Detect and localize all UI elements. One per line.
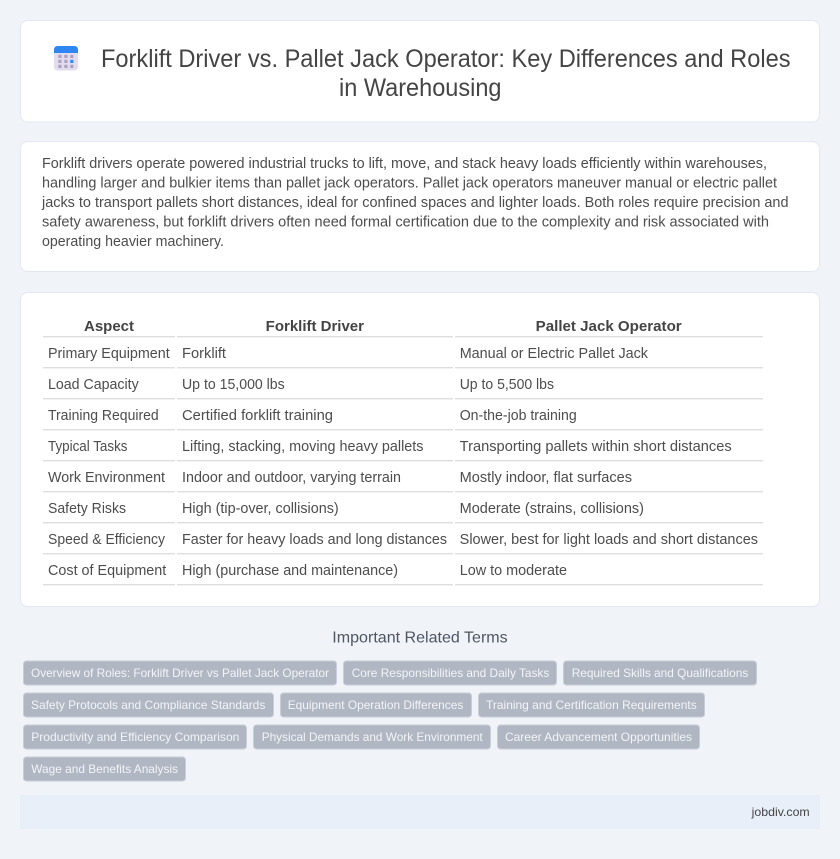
tag: physical demands: Physical Demands and Work Environment [262, 730, 483, 744]
text block: summary paragraph: jacks to transport pallets short distances, ideal for confined spaces and lighter loads. Both roles require precision and [41, 195, 789, 211]
text block: summary paragraph: Forklift drivers operate powered industrial trucks to lift, move, and stack heavy loads efficiently within warehouses, [42, 156, 767, 172]
table row: training required: Training Required [48, 408, 159, 424]
title: Forklift Driver vs. Pallet Jack Operator: Key Differences and Roles [101, 45, 790, 73]
table row: primary equipment [43, 346, 763, 368]
table row: cost of equipment [43, 563, 763, 585]
table row: training required [43, 408, 763, 430]
text block: summary paragraph: operating heavier machinery. [42, 234, 224, 250]
tag: required skills [564, 661, 756, 685]
table header row: Forklift Driver [266, 319, 364, 335]
table row: typical tasks: Typical Tasks [48, 439, 128, 455]
tag: wage and benefits: Wage and Benefits Analysis [31, 762, 178, 776]
table row: safety risks: Safety Risks [48, 501, 126, 517]
tag: equipment operation: Equipment Operation Differences [288, 698, 463, 712]
icon: calendar [54, 46, 78, 70]
table header row: Pallet Jack Operator [536, 319, 682, 335]
table row: work environment [43, 470, 763, 492]
table row: safety risks: High (tip-over, collisions) [182, 501, 339, 517]
text block: summary paragraph: safety awareness, but forklift drivers often need formal certification due to the complexity and risk associated with [42, 214, 769, 230]
tag: career advancement [498, 725, 700, 749]
title [101, 45, 790, 102]
table row: primary equipment: Forklift [182, 346, 226, 362]
table row: load capacity: Up to 15,000 lbs [182, 377, 285, 393]
panel: comparison table [20, 292, 820, 606]
table row: load capacity: Up to 5,500 lbs [460, 377, 554, 393]
tag: overview of roles [24, 661, 336, 685]
table row: speed and efficiency: Slower, best for light loads and short distances [460, 532, 758, 548]
table row: primary equipment: Manual or Electric Pallet Jack [460, 346, 649, 362]
tag: core responsibilities: Core Responsibilities and Daily Tasks [352, 666, 549, 680]
tag: career advancement: Career Advancement Opportunities [505, 730, 692, 744]
table row: load capacity: Load Capacity [48, 377, 139, 393]
tag: productivity [24, 725, 246, 749]
table row: primary equipment: Primary Equipment [48, 346, 170, 362]
table row: typical tasks: Transporting pallets within short distances [460, 439, 732, 455]
footer [20, 795, 820, 829]
table row: cost of equipment: High (purchase and maintenance) [182, 563, 398, 579]
table row: typical tasks: Lifting, stacking, moving heavy pallets [182, 439, 424, 455]
table row: work environment: Mostly indoor, flat surfaces [460, 470, 632, 486]
tag: overview of roles: Overview of Roles: Forklift Driver vs Pallet Jack Operator [31, 666, 329, 680]
panel: summary [20, 142, 820, 272]
table header row [43, 319, 763, 337]
table row: work environment: Work Environment [48, 470, 165, 486]
table row: training required: Certified forklift training [182, 408, 333, 424]
tag: wage and benefits [24, 757, 186, 781]
tag: equipment operation [280, 693, 472, 717]
tag: productivity: Productivity and Efficiency Comparison [31, 730, 239, 744]
panel: header [20, 20, 820, 122]
table row: safety risks [43, 501, 763, 523]
tag: training and certification [478, 693, 704, 717]
table row: speed and efficiency [43, 532, 763, 554]
tag: required skills: Required Skills and Qualifications [572, 666, 748, 680]
table row: speed and efficiency: Speed & Efficiency [48, 532, 166, 548]
tag: training and certification: Training and Certification Requirements [486, 698, 697, 712]
tag: safety protocols [24, 693, 274, 717]
text block: summary paragraph [41, 156, 789, 250]
table row: safety risks: Moderate (strains, collisions) [460, 501, 644, 517]
table row: cost of equipment: Cost of Equipment [48, 563, 166, 579]
table row: training required: On-the-job training [460, 408, 577, 424]
tag: safety protocols: Safety Protocols and Compliance Standards [31, 698, 265, 712]
heading: important related terms: Important Related Terms [332, 630, 508, 647]
table row: work environment: Indoor and outdoor, varying terrain [182, 470, 401, 486]
panel: related term tags [24, 661, 756, 781]
tag: physical demands [254, 725, 490, 749]
footer credit: jobdiv.com [751, 805, 810, 819]
title: in Warehousing [339, 74, 502, 102]
tag: core responsibilities [344, 661, 556, 685]
text block: summary paragraph: handling larger and bulkier items than pallet jack operators. Pallet jack operators maneuver manual or electric pallet [42, 176, 777, 192]
table row: speed and efficiency: Faster for heavy loads and long distances [182, 532, 447, 548]
table header row: Aspect [84, 319, 134, 335]
table row: cost of equipment: Low to moderate [460, 563, 567, 579]
table row: typical tasks [43, 439, 763, 461]
table row: load capacity [43, 377, 763, 399]
